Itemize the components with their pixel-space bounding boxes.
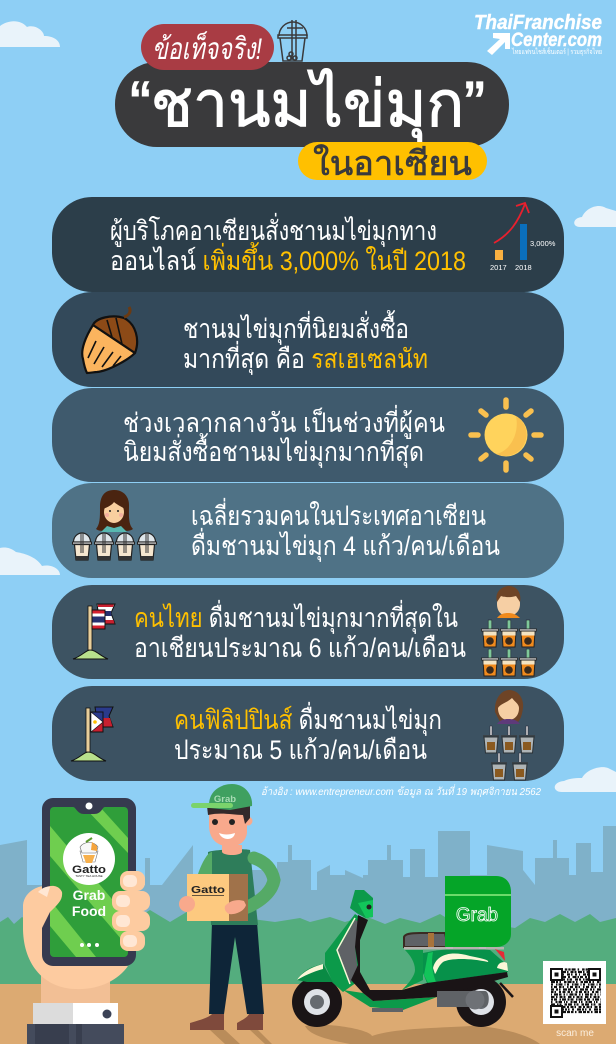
front wheel	[292, 977, 342, 1027]
title main pill	[115, 62, 509, 147]
lower green strip	[343, 990, 437, 1010]
icons: four cups	[72, 533, 156, 560]
QR code	[543, 961, 606, 1024]
illustration: hand holding phone	[23, 798, 150, 1044]
logo: ThaiFranchise Center.com: Center.com	[511, 30, 602, 51]
cap	[191, 784, 252, 810]
panel text: อาเชียนประมาณ 6 แก้ว/คน/เดือน	[134, 633, 466, 663]
tail light	[495, 949, 505, 961]
illustration: Grab scooter	[292, 876, 540, 1044]
rear wheel	[456, 977, 506, 1027]
panel text highlight: มากที่สุด คือ รสเฮเซลนัท	[183, 341, 428, 375]
cloud right bottom	[555, 767, 616, 792]
rack	[446, 937, 453, 949]
front fender	[297, 964, 333, 982]
delivery box	[445, 876, 511, 947]
logo: ThaiFranchise Center.com: ThaiFranchise	[474, 12, 602, 34]
parcel box: Gatto	[191, 884, 225, 896]
scan me label: scan me	[556, 1028, 594, 1039]
neck and head	[222, 845, 242, 855]
subtitle text: ข้อเท็จจริง!	[152, 31, 263, 66]
icon: bubble tea cup on title	[278, 20, 307, 61]
logo: ThaiFranchise Center.com	[474, 12, 602, 56]
bar chart: 3,000%	[530, 239, 556, 248]
parcel box	[187, 874, 248, 921]
panel: online orders	[52, 197, 564, 292]
icon: acorn	[82, 307, 137, 373]
icon: Thai flag	[73, 604, 115, 659]
panel: Thai people	[52, 585, 564, 679]
logo circle	[63, 833, 115, 885]
cap: Grab	[214, 794, 236, 805]
arm	[245, 858, 274, 908]
panel text: ดื่มชานมไข่มุก 4 แก้ว/คน/เดือน	[191, 528, 500, 562]
palm	[23, 886, 128, 989]
icon: man	[496, 586, 520, 618]
cloud top left	[0, 21, 60, 47]
shadow	[305, 1025, 540, 1044]
panel: ASEAN average	[52, 483, 564, 578]
logo circle: Gatto	[72, 864, 106, 876]
wrist and sleeve	[27, 975, 124, 1044]
shoes	[190, 1014, 224, 1030]
engine	[437, 991, 489, 1007]
rear body	[423, 949, 508, 983]
middle panel	[402, 950, 423, 990]
panel: hazelnut	[52, 292, 564, 387]
panel text: ผู้บริโภคอาเซียนสั่งชานมไข่มุกทาง	[110, 213, 437, 247]
torso	[208, 849, 258, 925]
icon: woman	[96, 490, 133, 532]
cloud right middle	[574, 206, 616, 227]
subtitle pill: in ASEAN	[298, 142, 487, 183]
subtitle text: ในอาเซียน	[313, 144, 472, 183]
icon: sun	[471, 400, 541, 470]
front shield	[325, 914, 367, 992]
handlebar	[350, 890, 373, 918]
seat	[404, 933, 448, 947]
panel text: ประมาณ 5 แก้ว/คน/เดือน	[174, 735, 427, 765]
hands	[179, 896, 195, 912]
illustration: delivery man	[179, 784, 274, 1044]
panel text: นิยมสั่งซื้อชานมไข่มุกมากที่สุด	[123, 433, 424, 468]
bar chart	[490, 203, 556, 272]
panel text: เฉลี่ยรวมคนในประเทศอาเซียน	[191, 498, 486, 531]
city skyline	[0, 826, 616, 990]
bushes	[0, 910, 616, 990]
bar chart: 2018	[515, 263, 532, 272]
thumb	[23, 886, 62, 935]
phone label: Food	[72, 903, 106, 919]
fingers	[112, 871, 150, 951]
panel text highlight: คนไทย ดื่มชานมไข่มุกมากที่สุดใน	[134, 600, 458, 634]
panel text: ช่วงเวลากลางวัน เป็นช่วงที่ผู้คน	[123, 405, 445, 439]
panel text: ชานมไข่มุกที่นิยมสั่งซื้อ	[183, 310, 409, 345]
trousers	[209, 922, 264, 1014]
icon: Philippines flag	[71, 707, 113, 761]
icons: five cups	[483, 726, 535, 780]
panel: Philippines	[52, 686, 564, 781]
delivery box: Grab	[456, 905, 498, 926]
frame spine	[351, 915, 508, 1001]
icon: woman	[495, 690, 523, 724]
ground	[0, 984, 616, 1044]
leg shield panel	[338, 920, 363, 983]
panel text highlight: คนฟิลิปปินส์ ดื่มชานมไข่มุก	[174, 702, 442, 736]
panel text highlight: ออนไลน์ เพิ่มขึ้น 3,000% ในปี 2018	[110, 242, 466, 276]
icons: six cups	[482, 620, 536, 676]
phone	[42, 798, 136, 966]
bar chart: 2017	[490, 263, 507, 272]
title text: “ชานมไข่มุก”	[130, 68, 485, 143]
tail guard	[500, 983, 513, 997]
source citation: อ้างอิง : www.entrepreneur.com ข้อมูล ณ วันที่ 19 พฤศจิกายน 2562	[261, 784, 541, 798]
phone label: Grab	[73, 887, 105, 903]
logo circle: TASTY TEA HOUSE	[75, 874, 103, 878]
shadow	[210, 1030, 272, 1044]
subtitle pill: fact	[141, 24, 274, 70]
cloud left middle	[0, 547, 60, 575]
panel: daytime	[52, 388, 564, 482]
